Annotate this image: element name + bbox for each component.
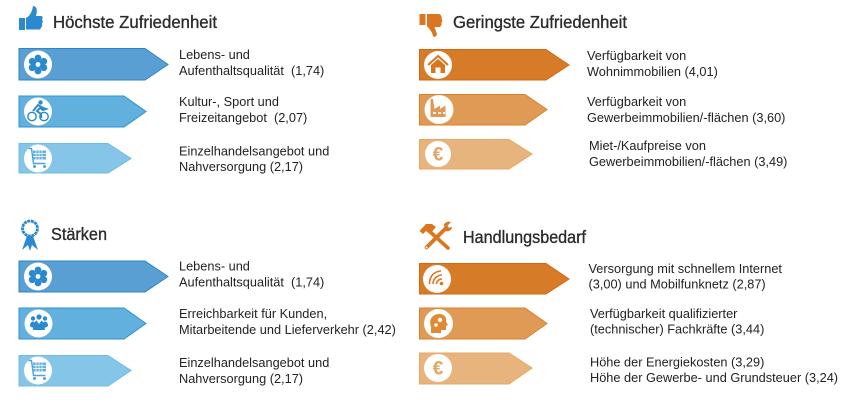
text: Einzelhandel: Einzelhandelsangebot und xyxy=(179,144,329,158)
icon: thumbs down xyxy=(420,14,442,37)
arrow: Wohnimmobilien xyxy=(420,50,569,80)
text: Energiekosten: Höhe der Energiekosten (3,29) xyxy=(590,354,764,370)
arrow: Erreichbarkeit xyxy=(19,308,146,339)
arrow: Mietpreise: € xyxy=(433,144,444,166)
panel: Stärken xyxy=(19,221,396,386)
text: Lebensqualität: Lebens- und xyxy=(179,47,250,62)
text: Fachkräfte: Verfügbarkeit qualifizierter xyxy=(590,306,738,321)
text: Lebensqualität: Aufenthaltsqualität (1,74) xyxy=(179,274,324,290)
text: Mietpreise: Miet-/Kaufpreise von xyxy=(589,138,706,153)
text: Einzelhandel: Nahversorgung (2,17) xyxy=(179,159,303,174)
heading: Handlungsbedarf: Handlungsbedarf xyxy=(463,227,586,247)
heading: Geringste Zufriedenheit: Geringste Zufriedenheit xyxy=(453,12,627,32)
text: Internet: Versorgung mit schnellem Internet xyxy=(588,261,782,276)
text: Einzelhandel: Nahversorgung (2,17) xyxy=(179,371,303,386)
arrow: Mietpreise xyxy=(420,140,532,169)
arrow: Fachkräfte xyxy=(420,308,547,339)
arrow: Einzelhandel xyxy=(19,356,131,386)
arrow: Lebensqualität xyxy=(19,261,168,292)
icon: ribbon xyxy=(22,221,38,251)
arrow: Energiekosten xyxy=(420,353,532,384)
text: Gewerbeimmobilien: Gewerbeimmobilien/-flächen (3,60) xyxy=(587,110,785,125)
heading: Stärken: Stärken xyxy=(51,224,107,244)
panel: Geringste Zufriedenheit xyxy=(420,12,787,169)
panel: Handlungsbedarf xyxy=(420,222,838,385)
text: Kultur: Freizeitangebot (2,07) xyxy=(179,110,307,125)
arrow: Gewerbeimmobilien xyxy=(420,94,547,125)
panel: Höchste Zufriedenheit xyxy=(19,6,329,174)
arrow: Energiekosten: € xyxy=(433,358,444,380)
text: Internet: (3,00) und Mobilfunknetz (2,87) xyxy=(588,276,766,292)
text: Einzelhandel: Einzelhandelsangebot und xyxy=(179,355,329,370)
text: Wohnimmobilien: Wohnimmobilien (4,01) xyxy=(587,64,718,79)
arrow: Lebensqualität xyxy=(19,48,168,80)
text: Mietpreise: Gewerbeimmobilien/-flächen (3,49) xyxy=(589,154,787,169)
text: Energiekosten: Höhe der Gewerbe- und Grundsteuer (3,24) xyxy=(590,370,838,385)
text: Kultur: Kultur-, Sport und xyxy=(179,94,279,109)
arrow: Einzelhandel xyxy=(19,144,131,173)
text: Gewerbeimmobilien: Verfügbarkeit von xyxy=(587,94,686,109)
arrow: Kultur xyxy=(19,96,146,127)
icon: thumbs up xyxy=(19,6,43,30)
arrow: Internet xyxy=(420,264,569,294)
text: Fachkräfte: (technischer) Fachkräfte (3,44) xyxy=(590,322,764,336)
text: Lebensqualität: Lebens- und xyxy=(179,258,250,274)
icon: tools xyxy=(420,222,452,248)
text: Erreichbarkeit: Erreichbarkeit für Kunden, xyxy=(179,306,327,321)
text: Erreichbarkeit: Mitarbeitende und Lieferverkehr (2,42) xyxy=(179,322,396,337)
text: Wohnimmobilien: Verfügbarkeit von xyxy=(587,48,686,63)
text: Lebensqualität: Aufenthaltsqualität (1,74) xyxy=(179,63,324,78)
heading: Höchste Zufriedenheit: Höchste Zufriedenheit xyxy=(53,12,217,32)
